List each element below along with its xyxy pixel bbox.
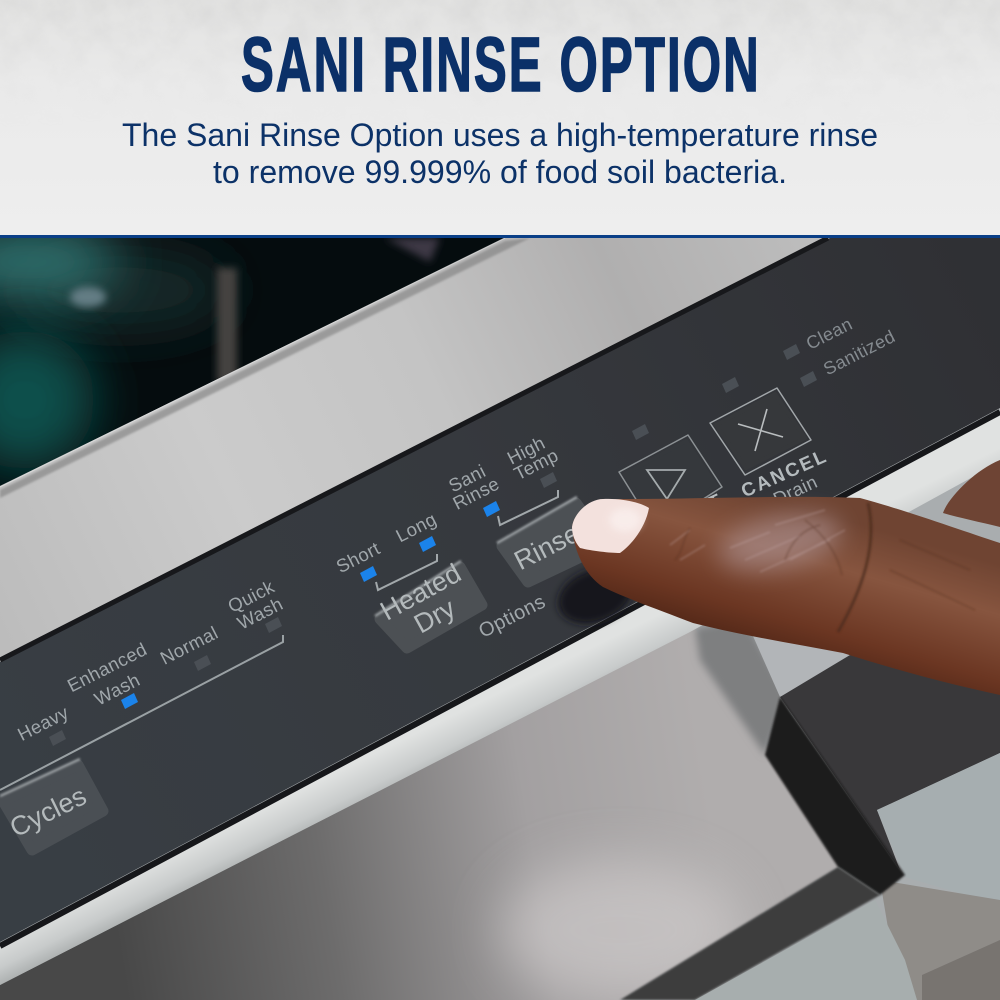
pale steel behind finger (745, 618, 860, 697)
subtitle: to remove 99.999% of food soil bacteria. (213, 154, 787, 190)
button: start (619, 435, 725, 530)
button: Cycles (0, 759, 103, 850)
cancel drain labels: CANCEL (738, 446, 831, 502)
blue divider (0, 235, 1000, 238)
skin creases (675, 520, 975, 610)
steel shade along window edge (0, 238, 530, 498)
heated dry labels: Short (333, 537, 383, 577)
door highlight (500, 860, 740, 1000)
upper stainless steel band (0, 238, 845, 672)
cancel drain labels: Drain (770, 471, 821, 509)
cycle labels: Quick (224, 576, 278, 617)
lower stainless door (0, 628, 840, 1000)
button: Heated Dry: Heated (375, 558, 466, 626)
status labels (803, 314, 898, 379)
cycle labels: Normal (157, 622, 221, 669)
silver handle face (877, 753, 1000, 905)
button: Rinse (497, 497, 606, 582)
heated dry labels (333, 508, 440, 577)
photo: dishwasher control panel (0, 224, 1000, 1000)
button: Rinse: Rinse (509, 518, 584, 576)
button: Cycles: Cycles (5, 781, 91, 843)
button: Heated Dry: Dry (409, 593, 461, 639)
panel bottom edge (0, 412, 1000, 946)
nail shine (609, 508, 641, 532)
cycle labels: Wash (234, 593, 286, 634)
cycle labels: Wash (91, 669, 143, 710)
silver handle lower band (695, 900, 917, 1000)
rinse labels: Sani (445, 460, 489, 496)
knuckle crease (838, 503, 871, 632)
options label: Options (475, 591, 549, 643)
lavender knuckle highlight (714, 504, 846, 580)
rinse labels (445, 432, 562, 514)
heated dry labels: Long (392, 508, 440, 546)
rinse labels: Rinse (449, 473, 503, 514)
shadow beside door (695, 618, 790, 755)
status labels: Clean (803, 314, 856, 354)
background window: dark interior (0, 238, 504, 486)
header background (0, 0, 1000, 235)
rinse bracket (498, 490, 558, 525)
paper texture (468, 14, 469, 15)
photo base (0, 236, 1000, 1000)
dim indicator lights (49, 344, 817, 746)
second finger (943, 460, 1000, 527)
bright trim strip (0, 415, 1000, 985)
status labels: Sanitized (820, 326, 898, 379)
steel edge highlight (0, 238, 505, 487)
dark handle side (780, 655, 1000, 870)
cycle labels (14, 576, 286, 745)
black control panel (0, 238, 1000, 942)
cycle labels: Enhanced (64, 638, 150, 696)
cycle bracket line (0, 635, 283, 790)
dark band below door (620, 867, 880, 1000)
skin wrinkles (670, 510, 845, 572)
button: Heated Dry (375, 558, 482, 648)
panel top edge (0, 238, 828, 660)
subtitle (122, 117, 878, 190)
blue indicator lights (121, 501, 500, 709)
fingernail (572, 499, 649, 553)
title: SANI RINSE OPTION (241, 21, 759, 108)
pointing finger (572, 497, 1000, 695)
black handle recess (765, 697, 905, 895)
subtitle: The Sani Rinse Option uses a high-temperature rinse (122, 117, 878, 153)
header panel (0, 0, 1000, 238)
rinse labels: Temp (510, 444, 562, 484)
button: cancel (710, 388, 811, 475)
cycle labels: Heavy (14, 701, 72, 745)
button: start: T (705, 490, 725, 515)
finger reflection (550, 559, 640, 633)
heated dry bracket (376, 554, 437, 590)
rinse labels: High (504, 432, 548, 469)
bottom corner steel (880, 880, 1000, 1000)
